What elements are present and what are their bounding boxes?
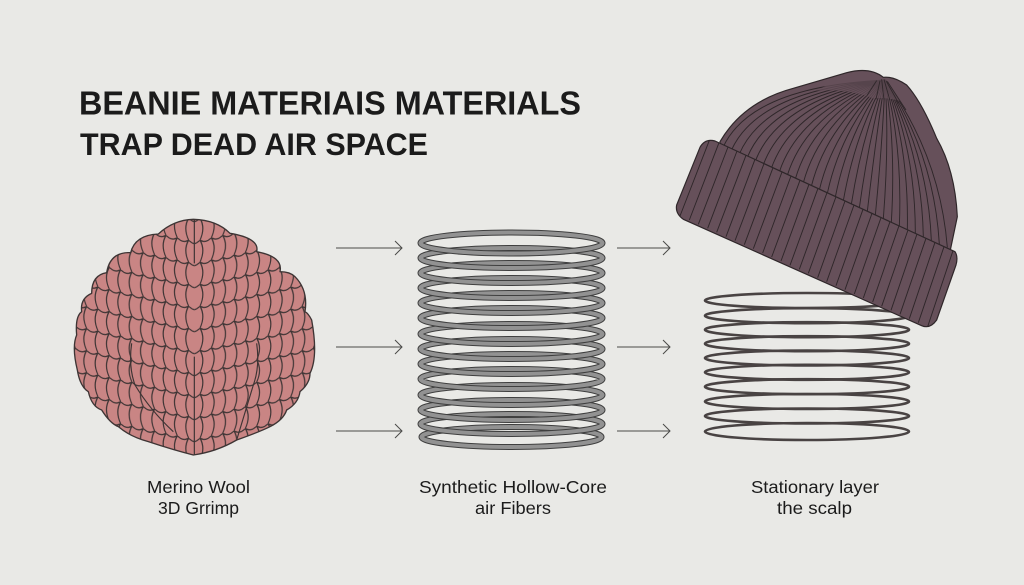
label: synthetic hollow-core: [419, 477, 607, 518]
arrows: fibers to stationary layer: [617, 241, 670, 438]
infographic canvas: [74, 70, 958, 518]
arrows: wool to fibers: [336, 241, 402, 438]
icon: synthetic hollow-core fiber rings: [420, 232, 602, 447]
beanie crown: [720, 71, 957, 252]
title: [79, 84, 581, 162]
label: merino wool: [147, 477, 250, 518]
label: synthetic hollow-core: Synthetic Hollow-Core: [419, 477, 607, 497]
label: stationary layer: Stationary layer: [751, 477, 879, 497]
icon: ribbed beanie: [676, 71, 957, 327]
icon: stationary air layer rings: [705, 293, 909, 440]
label: synthetic hollow-core: air Fibers: [475, 498, 551, 518]
label: stationary layer: the scalp: [777, 498, 852, 518]
title: TRAP DEAD AIR SPACE: [80, 126, 428, 162]
icon: merino wool crimp ball: [74, 219, 315, 455]
label: merino wool: Merino Wool: [147, 477, 250, 497]
label: merino wool: 3D Grrimp: [158, 498, 239, 518]
title: BEANIE MATERIAIS MATERIALS: [79, 84, 581, 122]
beanie folded cuff: [676, 139, 957, 327]
label: stationary layer: [751, 477, 879, 518]
